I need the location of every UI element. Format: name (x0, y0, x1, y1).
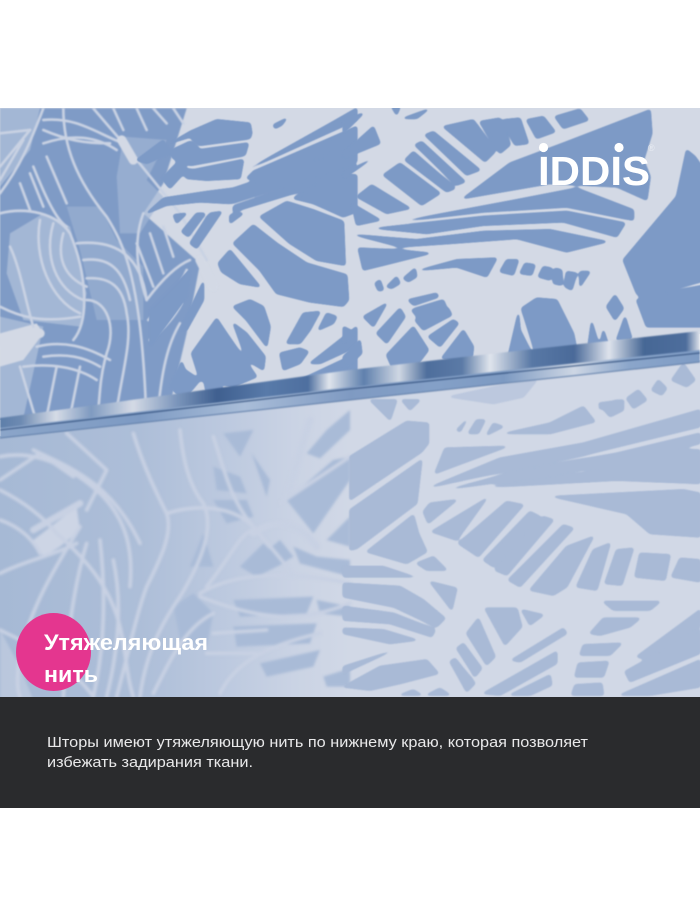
heading: weighted thread: нить (44, 662, 98, 687)
upper curtain layer (0, 100, 700, 440)
lower pattern right (343, 363, 700, 695)
weighted hem seam (0, 331, 700, 438)
logo: IDDIS: IDDIS (538, 148, 650, 194)
dark caption band (0, 697, 700, 808)
seam fold (0, 331, 700, 430)
heading: weighted thread: Утяжеляющая (44, 630, 208, 655)
caption text (47, 734, 588, 771)
logo: IDDIS: ® (648, 143, 655, 153)
lower pattern left (0, 410, 350, 700)
upper pattern right (343, 107, 700, 370)
lower curtain layer (0, 340, 700, 700)
upper pattern left (0, 108, 213, 433)
upper pattern center (137, 108, 357, 400)
hem strip (0, 350, 700, 438)
infographic canvas (0, 108, 700, 808)
heading: weighted thread (44, 630, 208, 687)
seam stitch lines (0, 353, 700, 430)
caption text: Шторы имеют утяжеляющую нить по нижнему краю, которая позволяет (47, 734, 588, 751)
caption text: избежать задирания ткани. (47, 754, 253, 771)
accent pink circle (16, 613, 91, 691)
fabric photo (0, 100, 700, 700)
